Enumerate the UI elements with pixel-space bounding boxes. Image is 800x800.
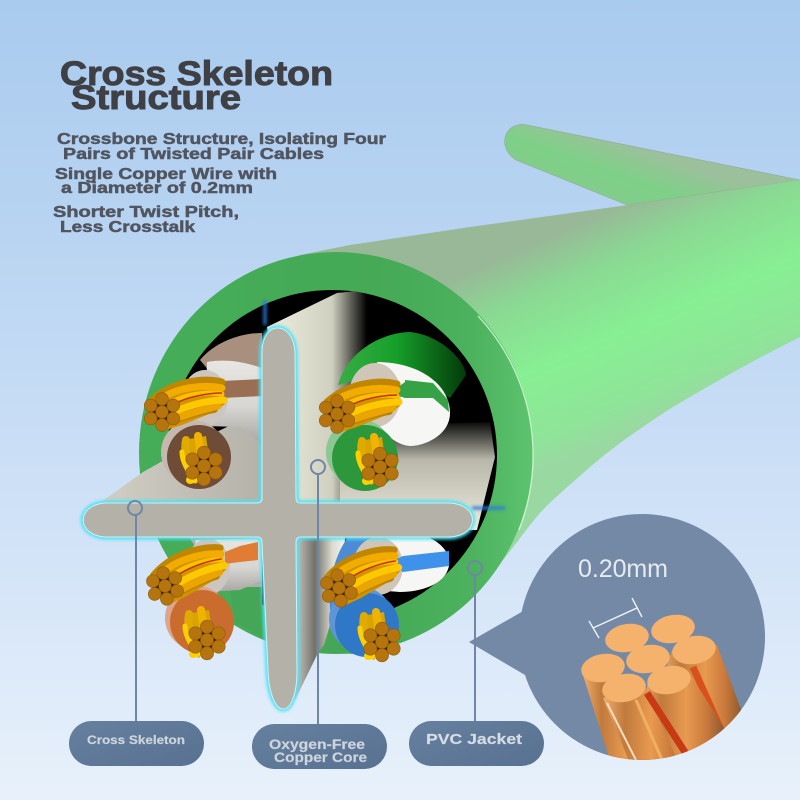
brown back wire xyxy=(200,333,262,372)
leader: jacket xyxy=(468,561,482,722)
brown wire sleeve xyxy=(161,420,225,484)
cable tail strand xyxy=(505,125,800,205)
brown wire end xyxy=(167,425,231,489)
left floor blade xyxy=(90,410,262,510)
feature 1: Pairs of Twisted Pair Cables xyxy=(63,146,324,163)
feature 2: a Diameter of 0.2mm xyxy=(61,180,253,197)
copper bundle xyxy=(317,547,404,610)
green wire end xyxy=(332,425,398,491)
leader: copper core xyxy=(311,460,325,725)
feature 2 xyxy=(55,166,277,197)
upper right blade xyxy=(267,290,367,503)
lower right floor blade xyxy=(340,422,495,530)
label: PVC jacket xyxy=(409,721,544,766)
title xyxy=(60,55,333,117)
feature 3: Shorter Twist Pitch, xyxy=(53,204,239,221)
wire pair: orange xyxy=(143,538,262,660)
green wire sleeve xyxy=(326,419,392,485)
PVC jacket ring xyxy=(139,252,533,654)
title: Structure xyxy=(71,79,241,117)
white wire body xyxy=(375,362,450,446)
copper bundle xyxy=(144,379,225,431)
white wire body xyxy=(205,361,262,444)
title: Cross Skeleton xyxy=(60,55,333,93)
bubble circle xyxy=(519,514,765,760)
feature 1: Crossbone Structure, Isolating Four xyxy=(57,131,386,148)
label: cross skeleton xyxy=(69,721,204,766)
label: oxygen-free copper core: Copper Core xyxy=(274,750,368,765)
blue back wire xyxy=(330,537,375,610)
orange wire sleeve xyxy=(165,586,229,650)
blue wire sleeve xyxy=(329,587,393,651)
blue stripe xyxy=(390,551,449,572)
feature 2: Single Copper Wire with xyxy=(55,166,277,183)
ring patch xyxy=(230,587,262,637)
dimension label: 0.20mm xyxy=(578,555,668,583)
white wire body xyxy=(375,537,449,592)
feature 3: Less Crosstalk xyxy=(60,219,195,236)
cross skeleton xyxy=(83,300,505,709)
wire pair: brown xyxy=(144,333,262,489)
label: oxygen-free copper core xyxy=(252,724,387,769)
inner skeleton blades xyxy=(90,290,495,700)
leader: cross skeleton xyxy=(128,501,142,722)
copper bundle xyxy=(319,381,400,433)
brown stripe xyxy=(222,379,262,398)
copper bundle xyxy=(143,545,230,608)
wire pair: blue xyxy=(317,537,449,662)
cable body xyxy=(300,180,800,600)
copper strands xyxy=(581,614,742,760)
orange wire end xyxy=(170,590,234,654)
label: oxygen-free copper core: Oxygen-Free xyxy=(269,737,366,752)
green stripe xyxy=(390,380,449,412)
lower vertical blade xyxy=(295,537,345,700)
dark green back wire xyxy=(338,332,466,398)
label: PVC jacket: PVC Jacket xyxy=(426,731,522,748)
lower left interior xyxy=(190,538,262,587)
feature 3 xyxy=(53,204,239,236)
wire pair: green xyxy=(319,332,466,491)
feature 1 xyxy=(57,131,386,163)
label: cross skeleton: Cross Skeleton xyxy=(87,733,185,747)
magnifier bubble xyxy=(469,514,765,760)
feature text xyxy=(53,131,386,236)
ring patch xyxy=(322,625,360,654)
blue wire end xyxy=(335,593,399,657)
dimension marker xyxy=(589,598,642,638)
orange stripe xyxy=(225,542,258,564)
bubble pointer xyxy=(469,610,525,675)
white wire body xyxy=(195,538,262,592)
